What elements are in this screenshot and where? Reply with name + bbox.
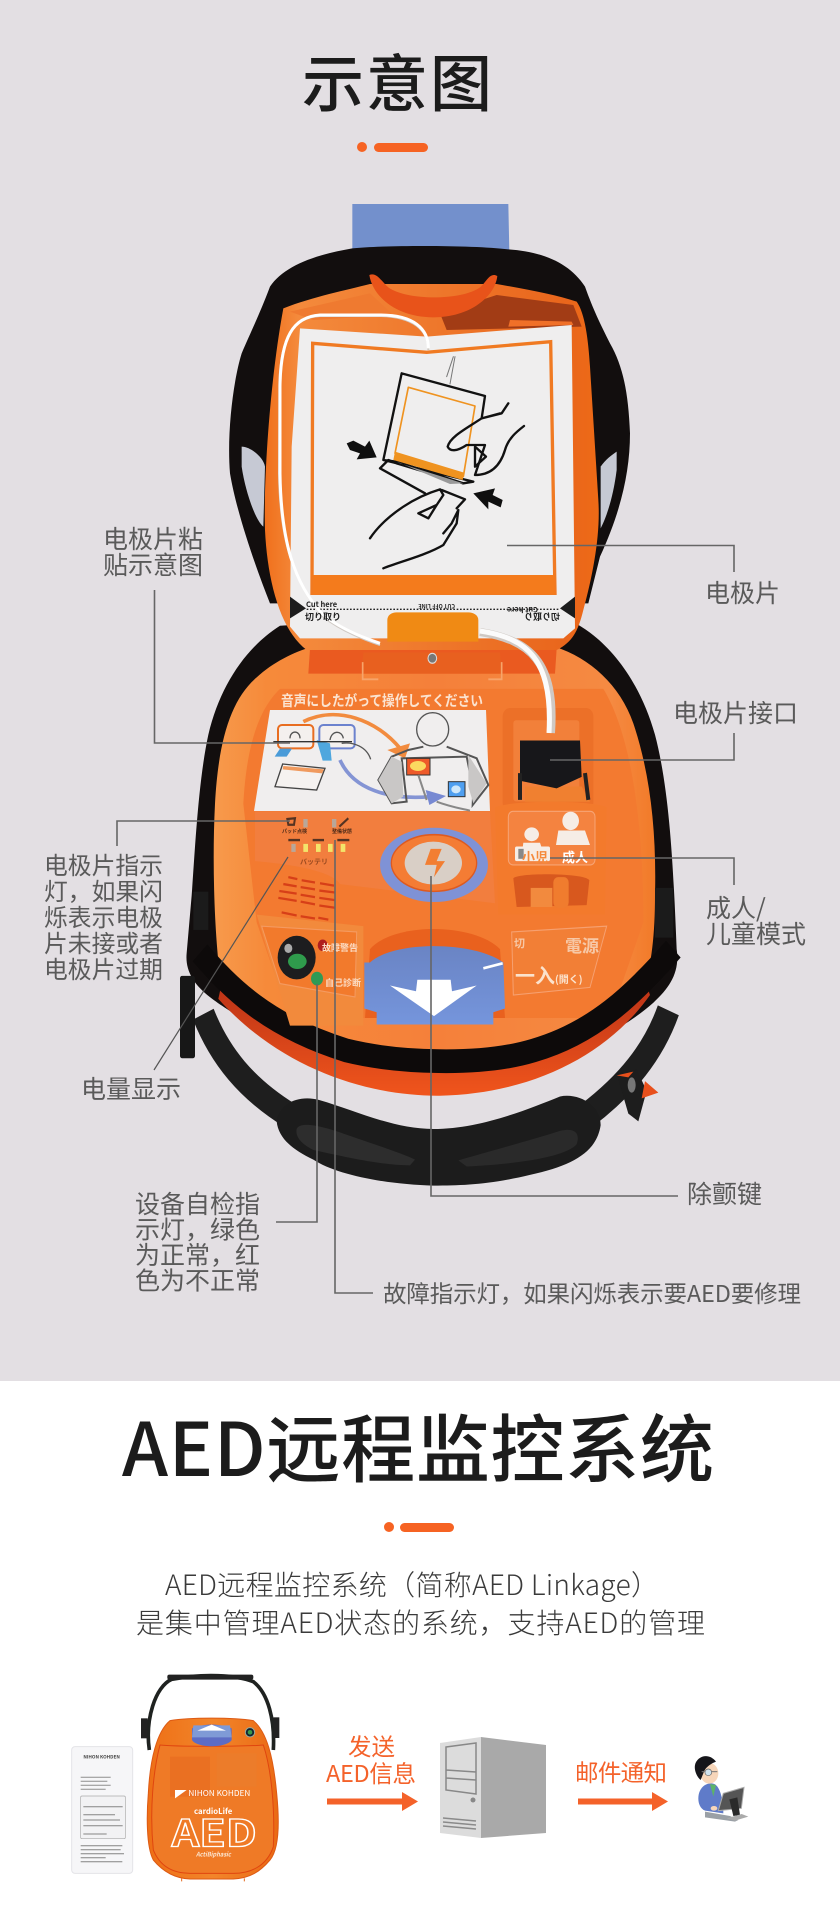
label: electrode placement diagram: 电极片粘 bbox=[103, 520, 203, 556]
mirrored cut-line text: CUT OFF LINE bbox=[418, 602, 455, 610]
indicator panel and switch labels: 電源 bbox=[565, 932, 599, 957]
leader line: self test bbox=[276, 984, 317, 1222]
icon: communication module card: NIHON KOHDEN bbox=[83, 1754, 120, 1760]
arrow: to operator bbox=[578, 1792, 668, 1811]
indicator panel and switch labels: バッテリ bbox=[300, 857, 328, 867]
icon: AED device closed: ActiBiphasic bbox=[195, 1850, 232, 1859]
label: pad indicator: 电极片指示 bbox=[44, 846, 163, 881]
label: self test: 为正常，红 bbox=[135, 1236, 260, 1272]
pad illustration: pouch bbox=[370, 357, 524, 568]
heading accent: dot and bar bbox=[357, 142, 428, 152]
shoulder pad bbox=[277, 1096, 601, 1186]
arrow: to server bbox=[327, 1792, 418, 1811]
indicator panel and switch labels: パッド点検 bbox=[282, 828, 307, 835]
label: battery display: 电量显示 bbox=[81, 1070, 181, 1106]
label: adult child mode: 儿童模式 bbox=[706, 915, 806, 951]
panel: remote monitoring section bbox=[0, 1381, 840, 1908]
label: electrode placement diagram: 贴示意图 bbox=[103, 546, 203, 582]
mirrored cut-line text bbox=[305, 599, 560, 623]
indicator panel and switch labels: 成人 bbox=[562, 847, 588, 866]
label: self test: 示灯，绿色 bbox=[135, 1210, 260, 1246]
indicator panel and switch labels: 小児 bbox=[522, 847, 548, 866]
label: adult child mode: 成人/ bbox=[706, 889, 766, 925]
indicator panel and switch labels: 一入(開く) bbox=[515, 960, 583, 989]
instruction card: 音声にしたがって操作してください bbox=[281, 690, 483, 711]
indicator panel and switch labels bbox=[282, 828, 599, 989]
leader line: battery display bbox=[154, 857, 288, 1070]
cable to connector bbox=[480, 631, 552, 733]
leader line: adult child mode bbox=[550, 858, 734, 885]
label: send AED information: AED信息 bbox=[326, 1755, 416, 1789]
leader line: shock button bbox=[431, 876, 678, 1196]
icon: operator at computer bbox=[695, 1756, 748, 1822]
leader line: electrode placement diagram bbox=[154, 590, 290, 743]
label: shock button: 除颤键 bbox=[687, 1175, 762, 1211]
panel: diagram background bbox=[0, 0, 840, 1381]
mirrored cut-line text: 切り取り bbox=[524, 610, 560, 623]
leader line: fault indicator bbox=[335, 840, 373, 1293]
indicator panel and switch labels: 整備状態 bbox=[332, 828, 352, 835]
text block: system description: AED远程监控系统（简称AED Linkage） bbox=[165, 1564, 659, 1604]
leader line: connector bbox=[550, 733, 734, 760]
icon: AED device with open lid bbox=[180, 204, 677, 1186]
title: remote monitoring: AED远程监控系统 bbox=[122, 1391, 714, 1498]
lid with pad sheet bbox=[265, 274, 599, 650]
mirrored cut-line text: Cut here bbox=[306, 599, 338, 610]
black arrows bbox=[347, 441, 503, 509]
leader line: pad indicator bbox=[117, 821, 290, 846]
label: pad indicator: 片未接或者 bbox=[44, 924, 163, 959]
upper case bbox=[229, 246, 630, 603]
leader line: electrode pad bbox=[507, 546, 734, 572]
mirrored cut-line text: 切り取り bbox=[305, 610, 341, 623]
label: self test: 设备自检指 bbox=[135, 1185, 260, 1221]
label: electrode pad: 电极片 bbox=[705, 574, 780, 610]
indicator panel and switch labels: 故障警告 bbox=[322, 941, 358, 954]
pad sheet bbox=[290, 325, 575, 638]
label: pad indicator: 电极片过期 bbox=[44, 950, 163, 985]
mirrored cut-line text: Cut here bbox=[506, 604, 538, 615]
text block: system description: 是集中管理AED状态的系统，支持AED的管理 bbox=[136, 1602, 705, 1642]
indicator panel and switch labels: 自己診断 bbox=[325, 976, 361, 989]
heading accent: dot and bar bbox=[384, 1522, 454, 1532]
label: pad indicator: 灯，如果闪 bbox=[44, 872, 163, 907]
blue velcro strap bbox=[352, 204, 509, 252]
icon: AED device closed: AED bbox=[171, 1804, 257, 1858]
instruction card bbox=[254, 690, 490, 811]
lower case and orange body bbox=[180, 616, 677, 1186]
indicator panel and switch labels: 切 bbox=[514, 935, 525, 951]
label: connector: 电极片接口 bbox=[673, 694, 798, 730]
icon: AED device closed: NIHON KOHDEN bbox=[188, 1788, 250, 1799]
label: pad indicator: 烁表示电极 bbox=[44, 898, 163, 933]
icon: communication module card bbox=[72, 1747, 133, 1873]
label: email notification: 邮件通知 bbox=[575, 1754, 667, 1788]
label: send AED information: 发送 bbox=[348, 1728, 395, 1762]
label: self test: 色为不正常 bbox=[135, 1262, 260, 1298]
icon: AED device closed: cardioLife bbox=[194, 1806, 233, 1817]
cable bbox=[279, 316, 428, 645]
icon: AED device closed bbox=[141, 1675, 279, 1881]
label: fault indicator: 故障指示灯，如果闪烁表示要AED要修理 bbox=[383, 1275, 801, 1309]
title: diagram: 示意图 bbox=[302, 34, 492, 124]
icon: server bbox=[440, 1737, 546, 1838]
